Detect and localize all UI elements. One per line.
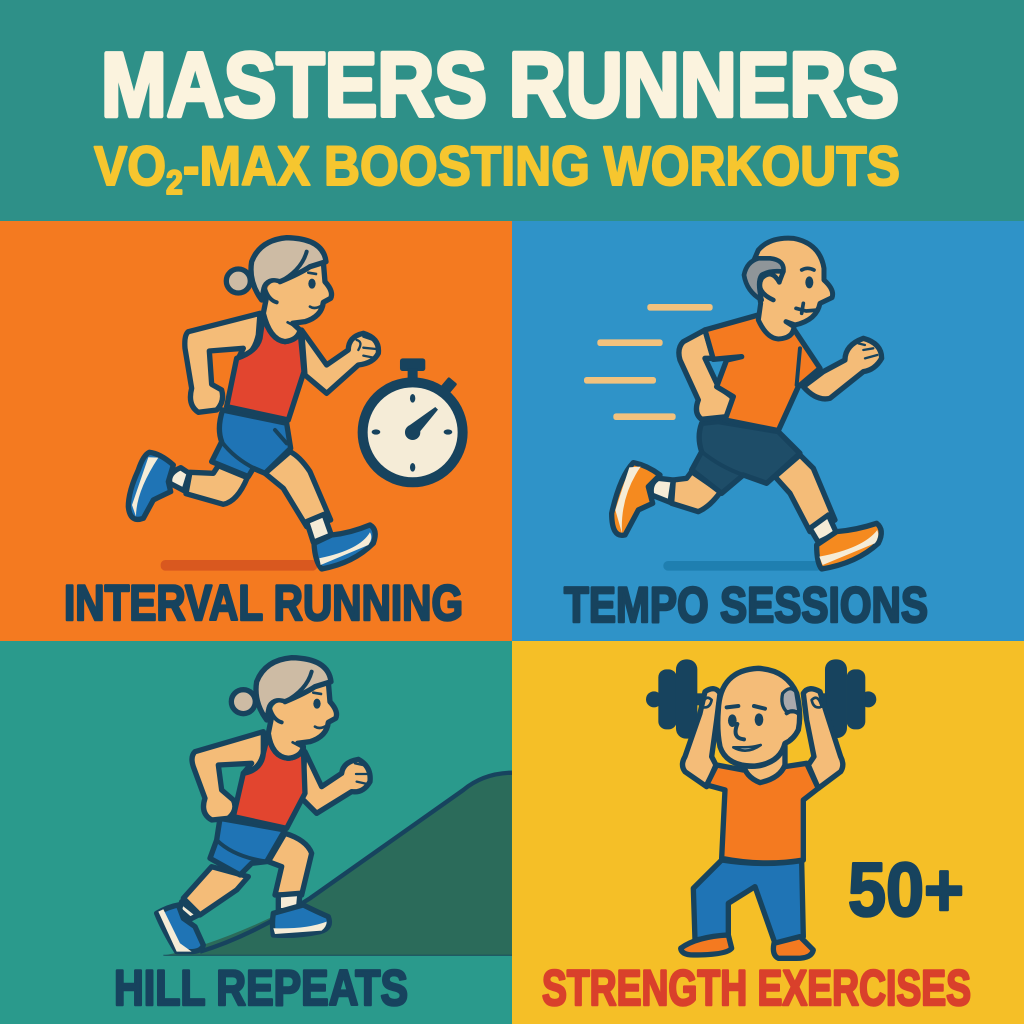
label: tempo sessions: TEMPO SESSIONS [564, 577, 928, 633]
title: MASTERS RUNNERS [101, 35, 899, 136]
panel: strength exercises [512, 641, 1024, 1024]
panel: tempo sessions [512, 221, 1024, 641]
icon: stopwatch [363, 358, 463, 482]
badge: 50+: 50+ [848, 848, 964, 933]
runner woman climbing [157, 658, 370, 952]
header panel [0, 0, 1024, 221]
runner woman with stopwatch [128, 238, 378, 571]
hill [163, 773, 512, 956]
subtitle: -MAX BOOSTING WORKOUTS [183, 134, 900, 197]
subtitle: VO [94, 134, 175, 197]
panel: hill repeats [0, 641, 512, 1024]
man's head [744, 238, 833, 339]
subtitle: 2 [166, 164, 183, 202]
label: hill repeats: HILL REPEATS [114, 960, 408, 1016]
label: interval running: INTERVAL RUNNING [64, 575, 463, 631]
panel: interval running [0, 221, 512, 641]
runner man with speed lines [584, 304, 882, 571]
man lifting dumbbells [646, 659, 876, 958]
